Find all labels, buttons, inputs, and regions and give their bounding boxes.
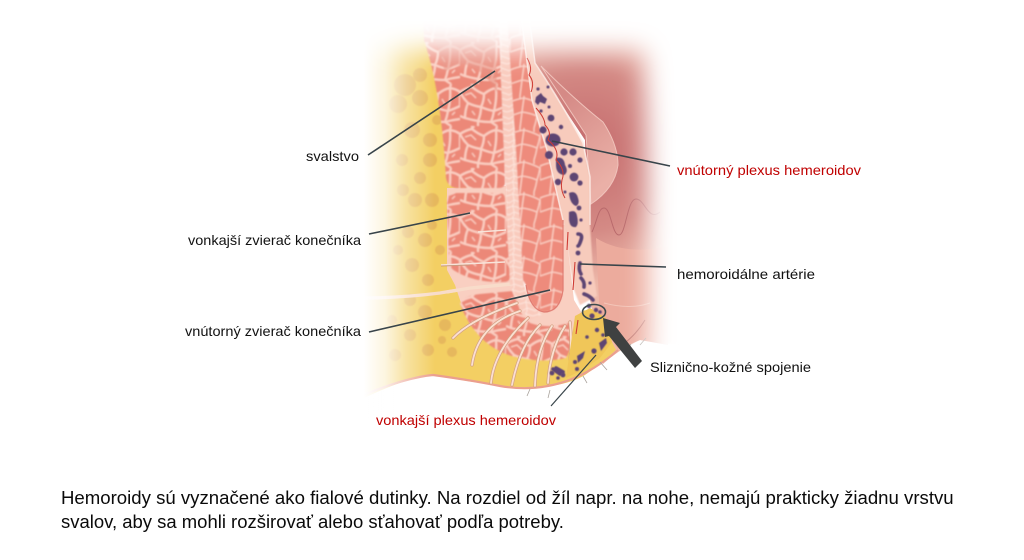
perianal hairs [527, 338, 646, 398]
skin edge [382, 350, 618, 390]
hemorrhoidal arteries [527, 58, 578, 334]
label: vonkajší zvierač konečníka: vonkajší zvierač konečníka [188, 232, 361, 248]
caption text: Hemoroidy sú vyznačené ako fialové dutinky. Na rozdiel od žíl napr. na nohe, nemajú prakticky žiadnu vrstvu [61, 487, 954, 508]
conjoint longitudinal strip [499, 36, 541, 316]
internal sphincter outline [526, 220, 563, 312]
lower lumen folds [592, 199, 660, 235]
label: hemoroidálne artérie: hemoroidálne artérie [677, 266, 815, 282]
internal sphincter [509, 31, 564, 312]
muscle fibres radiating into fat [453, 303, 586, 386]
caption text: svalov, aby sa mohli rozširovať alebo sťahovať podľa potreby. [61, 511, 564, 532]
mucosa edges [524, 38, 591, 225]
external sphincter: middle block [447, 193, 510, 282]
fat globules [387, 68, 457, 361]
callout: junction ring [582, 304, 606, 320]
external plexus yellow zone [566, 308, 612, 378]
label: svalstvo: svalstvo [306, 148, 359, 164]
internal plexus blobs [535, 93, 547, 105]
external sphincter: upper muscle [424, 31, 506, 189]
caption text [61, 487, 954, 532]
tendon band inner [447, 284, 512, 292]
tissue base under muscles [447, 186, 582, 334]
external plexus blobs [550, 251, 607, 380]
fat layer [370, 31, 616, 395]
arrow to mucocutaneous junction [603, 318, 642, 368]
rectal fold [541, 66, 618, 204]
anatomical illustration [370, 31, 666, 398]
septa in middle block [441, 230, 506, 265]
sphincter muscle masses [423, 0, 597, 360]
upper muscle pale fibres [438, 42, 498, 92]
label: vnútorný plexus hemeroidov: vnútorný plexus hemeroidov [677, 162, 861, 178]
fat fade to white [320, 30, 432, 406]
label: vonkajší plexus hemeroidov: vonkajší plexus hemeroidov [376, 412, 556, 428]
external sphincter: subcutaneous [460, 291, 572, 360]
squiggle plexus veins [553, 234, 593, 374]
anatomical diagram with labels [185, 31, 861, 428]
tendon band [372, 288, 456, 300]
label: Slizničn&#111;-kožné spojenie: Sliznično-kožné spojenie [650, 359, 811, 375]
lower rectal wall [596, 238, 668, 349]
label: vnútorný zvierač konečníka: vnútorný zvierač konečníka [185, 323, 361, 339]
hemorrhoid cavities [535, 86, 583, 227]
leader lines [368, 71, 670, 406]
lumen background [532, 33, 666, 364]
anal mucosa band [526, 36, 597, 306]
